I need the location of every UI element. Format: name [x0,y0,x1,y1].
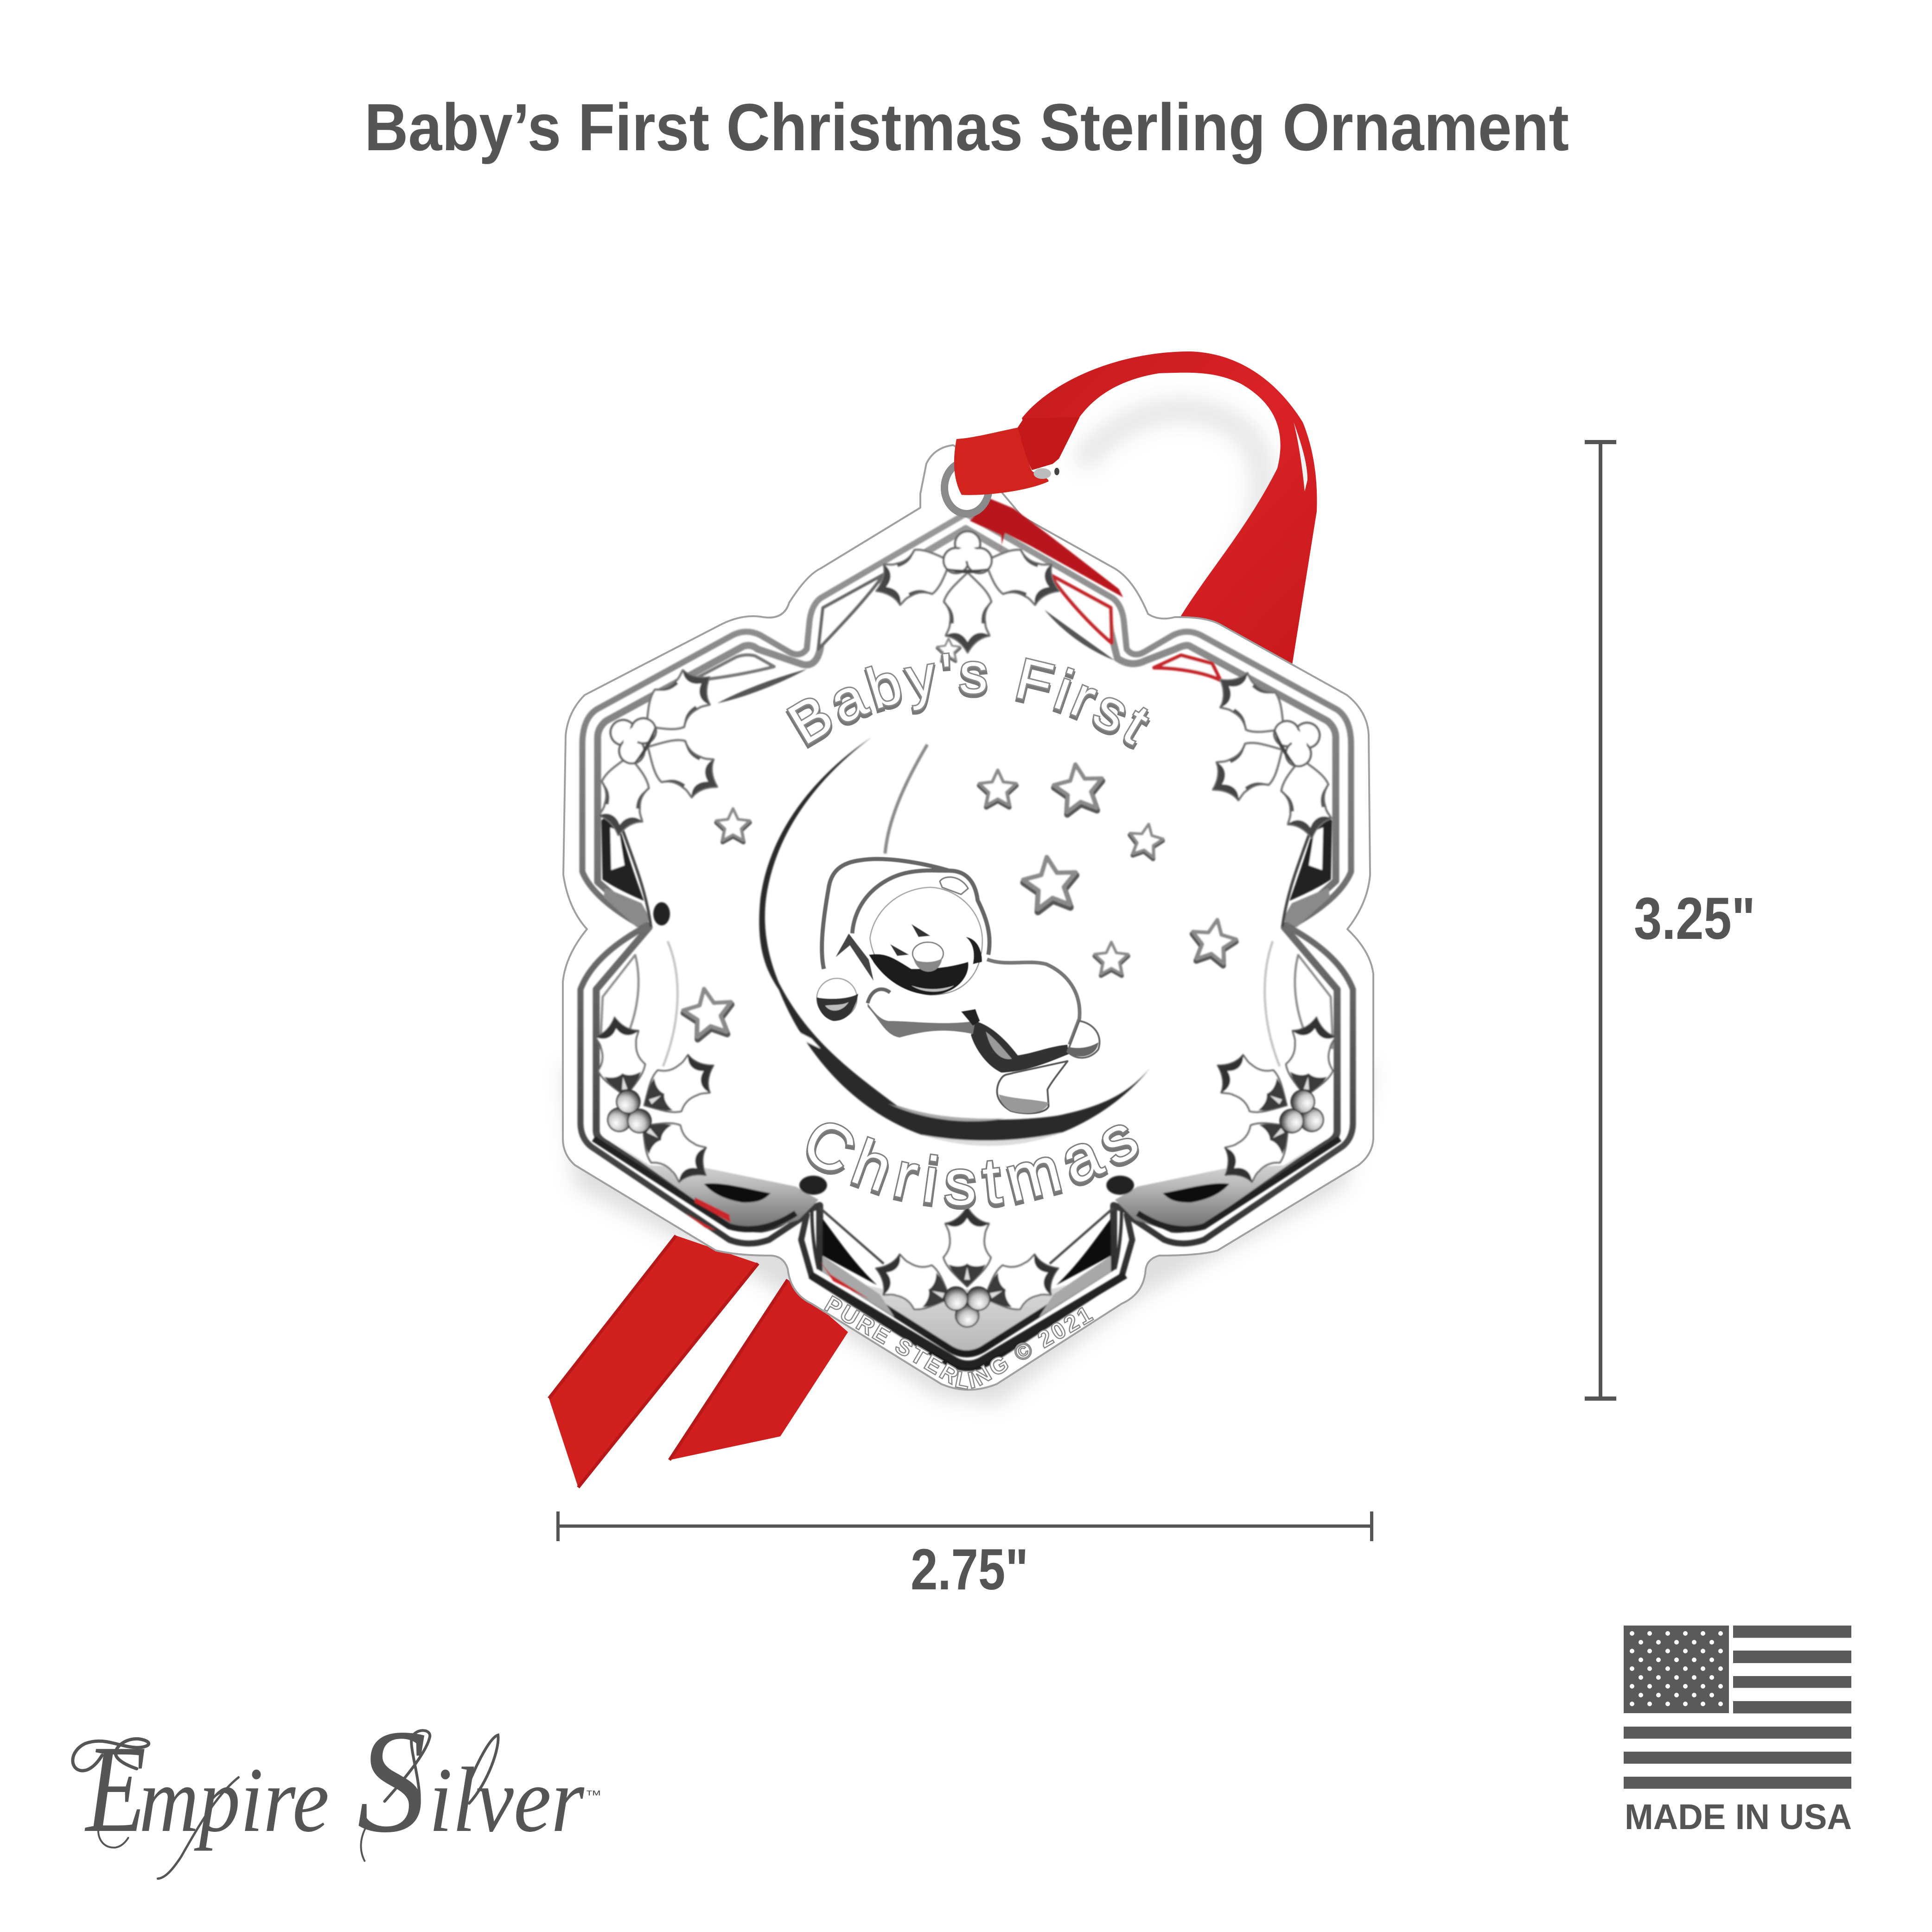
flag canton with stars [1624,1626,1729,1713]
ornament drop shadow [562,1066,1374,1405]
height dimension [1585,440,1755,1401]
tail [1067,1021,1099,1058]
eyelet ring [944,462,989,514]
embossed stars [680,638,1239,1041]
flag stripes [1624,1626,1851,1789]
made in USA flag badge [1624,1626,1852,1837]
bear head [869,887,982,995]
width label: 2.75" [911,1537,1028,1602]
dark V line on lower lobe [810,1275,1125,1364]
bear leg and foot [997,1061,1067,1113]
red reflection bars [685,1197,870,1300]
top left pocket [818,574,884,649]
holly clusters on six lobes [559,531,1372,1327]
made in USA label: MADE IN USA [1625,1797,1852,1837]
ornament illustration [549,351,1374,1487]
bear body [972,959,1080,1069]
logo: Empire Silver: S [357,1699,427,1863]
silver plate outline [563,445,1373,1390]
top and upper side pockets [601,498,1332,927]
logo: Empire Silver: ™ [585,1788,602,1802]
silver relief details [559,498,1372,1368]
ribbon loop shadow [1080,410,1263,617]
embossed text: Baby's First: Baby's First [778,644,1160,759]
teddy bear with nightcap [817,859,1099,1113]
ribbon knot [954,417,1080,495]
stamped hallmark: PURE STERLING © 2021 [821,1291,1097,1395]
logo: Empire Silver: mpire [139,1749,329,1851]
logo: Empire Silver: ilver [429,1749,585,1851]
nightcap [822,859,989,969]
logo: Empire Silver [73,1699,602,1879]
lower side pockets [600,955,1333,1048]
lower ribbon tails [549,1236,848,1487]
width dimension [556,1511,1373,1602]
bear arm [867,989,980,1038]
pompom [817,978,858,1021]
left notch knob [653,902,670,925]
height label: 3.25" [1634,886,1755,952]
embossed text: Christmas: Christmas [791,1099,1149,1219]
embossed rim lines [580,514,1353,1368]
crescent moon [759,737,1150,1146]
ear ring on cap [940,877,968,894]
embossed text: Baby's First: Baby's First [778,641,1160,757]
embossed text: Christmas: Christmas [791,1102,1149,1222]
red ribbon loop [1022,351,1317,668]
logo flourishes [73,1730,498,1879]
grey lower lobe face [830,1273,1103,1356]
title: Baby’s First Christmas Sterling Ornament [364,90,1569,165]
face creases [663,941,1280,1066]
bottom chrome pockets [593,1136,894,1317]
ribbon reflection on plate [970,498,1123,597]
logo: Empire Silver: E [84,1720,146,1858]
